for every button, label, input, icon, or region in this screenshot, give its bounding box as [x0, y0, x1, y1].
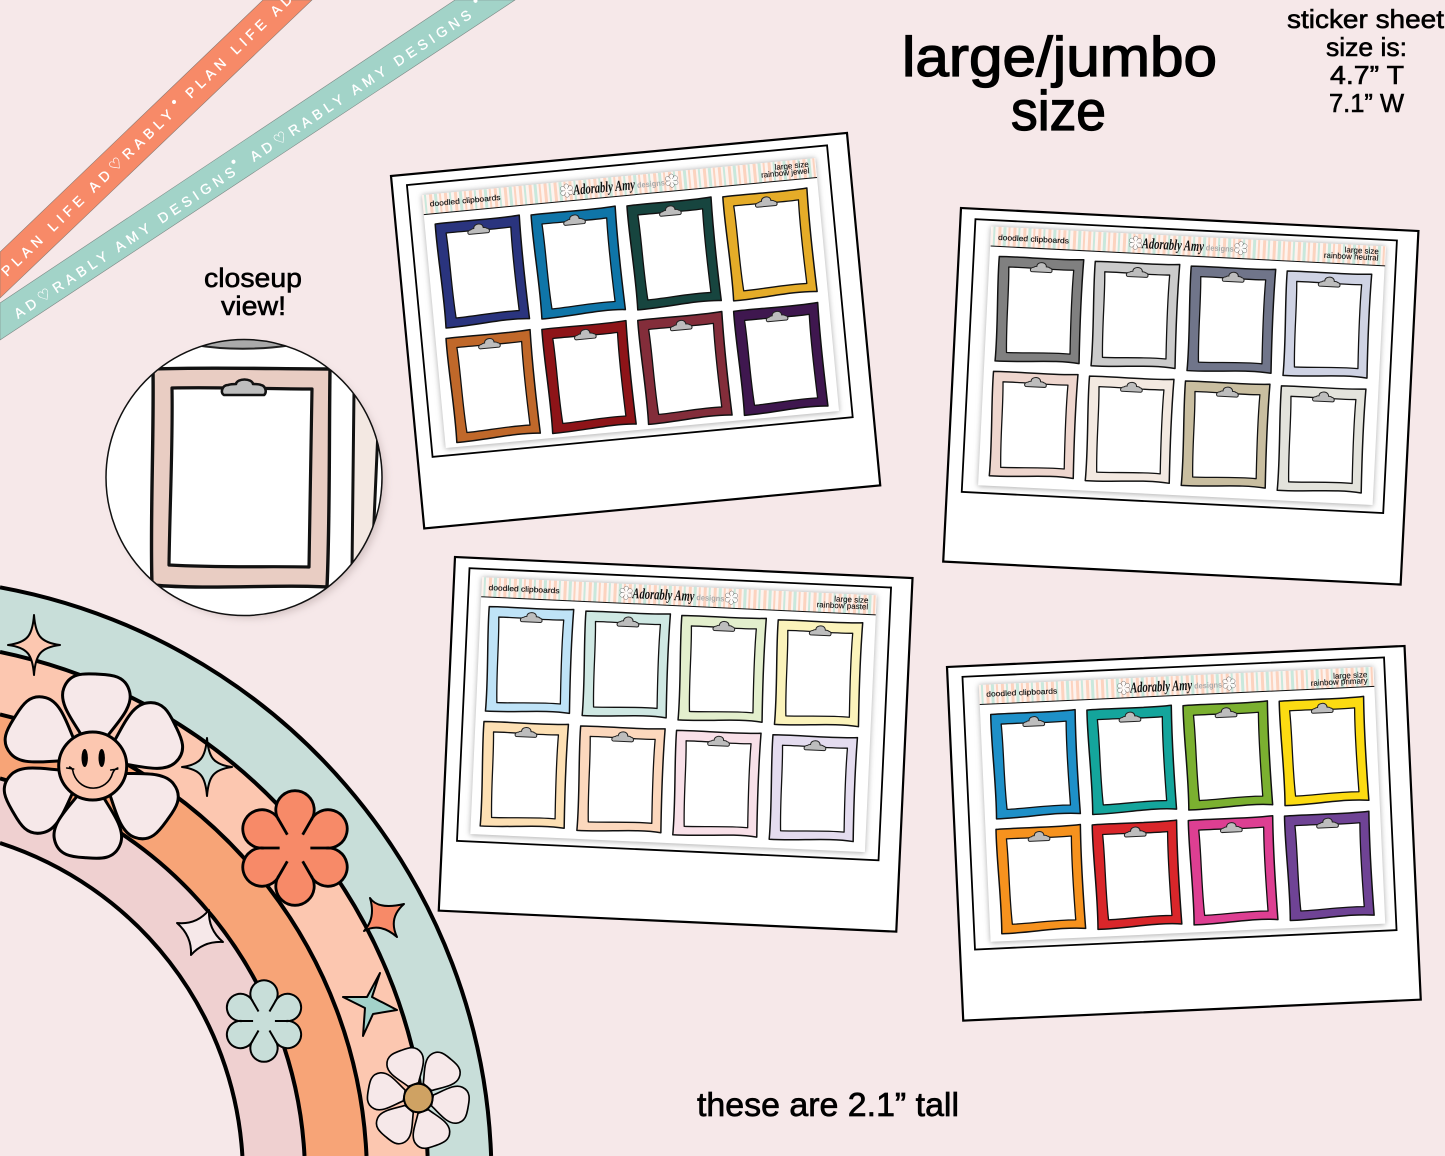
header strip — [422, 158, 817, 215]
clipboard: bright teal — [1087, 705, 1177, 815]
header strip: large size — [834, 594, 869, 605]
sparkle: teal — [343, 973, 397, 1036]
band: peach — [0, 652, 428, 1156]
clipboard: navy — [435, 215, 530, 328]
header strip: doodled clipboards — [998, 233, 1069, 245]
text: sticker sheet size: 4.7” T — [1330, 60, 1404, 90]
header strip — [991, 227, 1386, 266]
clipboard: cream — [1084, 375, 1174, 485]
text: closeup view — [204, 263, 302, 321]
text: sticker sheet size: size is: — [1326, 32, 1407, 62]
clipboard: slate — [1186, 265, 1276, 375]
flower: white daisy — [365, 1044, 471, 1152]
clipboard: bright green — [1183, 701, 1273, 810]
clipboard: bright violet — [1284, 811, 1374, 921]
sheet: rainbow jewel — [391, 133, 880, 528]
header strip: doodled clipboards — [488, 583, 560, 595]
header strip — [979, 667, 1374, 705]
sparkle: orange — [364, 898, 404, 937]
header strip: rainbow neutral — [1324, 251, 1379, 263]
header strip: designs — [1206, 243, 1235, 254]
caption: these are 2.1 tall: these are 2.1” tall — [697, 1086, 959, 1123]
clipboard: khaki — [1180, 380, 1270, 490]
clipboard: light grey — [1090, 260, 1180, 370]
text: sticker sheet size: 7.1” W — [1329, 88, 1404, 118]
text: sticker sheet size: sticker sheet — [1287, 4, 1445, 34]
clipboard: grey — [994, 255, 1084, 365]
ribbon: plan life adorably: PLAN LIFE AD♡RABLY — [0, 105, 177, 280]
clipboard: pastel mint — [581, 610, 671, 719]
sparkle: peach — [8, 615, 60, 675]
header strip: doodled clipboards — [429, 193, 501, 208]
clipboard: bright magenta — [1188, 816, 1278, 925]
header strip — [481, 577, 877, 615]
closeup circle — [106, 330, 385, 618]
heading: large/jumbo size — [902, 25, 1217, 142]
text: closeup view: view! — [221, 291, 286, 321]
ribbon: adorably amy designs — [0, 0, 515, 340]
clipboard: blue — [531, 206, 626, 319]
ribbon: plan life adorably: • — [166, 94, 181, 109]
rainbow — [0, 587, 491, 1156]
clipboard: pastel blue — [484, 606, 574, 715]
clipboard: red — [542, 321, 636, 434]
clipboard: rust — [446, 330, 540, 443]
band: mint — [0, 587, 491, 1156]
header strip: rainbow pastel — [816, 600, 869, 612]
clipboard: burgundy — [637, 311, 732, 425]
heading: large/jumbo size: size — [1011, 79, 1106, 142]
clipboard: purple — [733, 302, 828, 416]
clipboard: pastel apricot — [479, 720, 569, 830]
heading: large/jumbo size: large/jumbo — [902, 25, 1217, 88]
text: closeup view: closeup — [204, 263, 302, 293]
clipboard: bright yellow — [1279, 696, 1369, 806]
clipboard: gold — [723, 188, 817, 301]
ribbon: adorably amy designs: • — [227, 153, 240, 170]
clipboard: pale stone — [1276, 385, 1366, 495]
clipboard: dark teal — [627, 197, 721, 310]
clipboard: pastel yellow — [773, 619, 863, 728]
band: pink — [0, 778, 304, 1156]
sheet: rainbow pastel — [439, 557, 913, 932]
rainbow outlines — [0, 587, 491, 1156]
clipboard: pastel pink — [672, 729, 762, 839]
header strip: large size — [1333, 670, 1368, 681]
clipboard: pastel green — [677, 614, 767, 724]
header strip: Adorably Amy — [631, 586, 695, 605]
ribbon: adorably amy designs: AD♡RABLY AMY DESIGNS — [246, 6, 475, 165]
header strip: doodled clipboards — [986, 686, 1058, 699]
flower: smiley daisy — [0, 672, 190, 860]
header strip: Adorably Amy — [572, 177, 636, 199]
clipboard: pastel peach — [576, 725, 666, 834]
clipboard: bright blue — [990, 710, 1080, 819]
sparkle: white — [177, 910, 223, 955]
header strip: rainbow jewel — [761, 166, 810, 180]
ribbon: adorably amy designs: AD♡RABLY AMY DESIGNS — [10, 163, 239, 322]
flower: mint — [227, 980, 301, 1062]
sheet: rainbow neutral — [943, 208, 1418, 585]
flower: orange — [243, 791, 347, 905]
band: orange — [0, 714, 366, 1156]
header strip: large size — [774, 160, 810, 172]
sheet: rainbow primary — [947, 646, 1421, 1021]
clipboard: bright orange — [996, 825, 1086, 934]
header strip: Adorably Amy — [1141, 236, 1204, 255]
ribbon: plan life adorably — [0, 0, 312, 298]
clipboard: bright red — [1092, 820, 1182, 929]
text: sticker sheet size — [1287, 4, 1445, 118]
header strip: rainbow primary — [1311, 676, 1368, 688]
sparkle: mint — [182, 738, 232, 796]
header strip: Adorably Amy — [1129, 678, 1193, 697]
clipboard: pastel lilac — [768, 734, 858, 843]
clipboard: blush — [988, 370, 1078, 480]
inner background — [0, 843, 242, 1156]
clipboard: periwinkle grey — [1282, 270, 1372, 380]
header strip: designs — [1194, 680, 1223, 691]
header strip: large size — [1344, 245, 1380, 256]
header strip: designs — [637, 178, 666, 190]
header strip: designs — [696, 593, 725, 603]
